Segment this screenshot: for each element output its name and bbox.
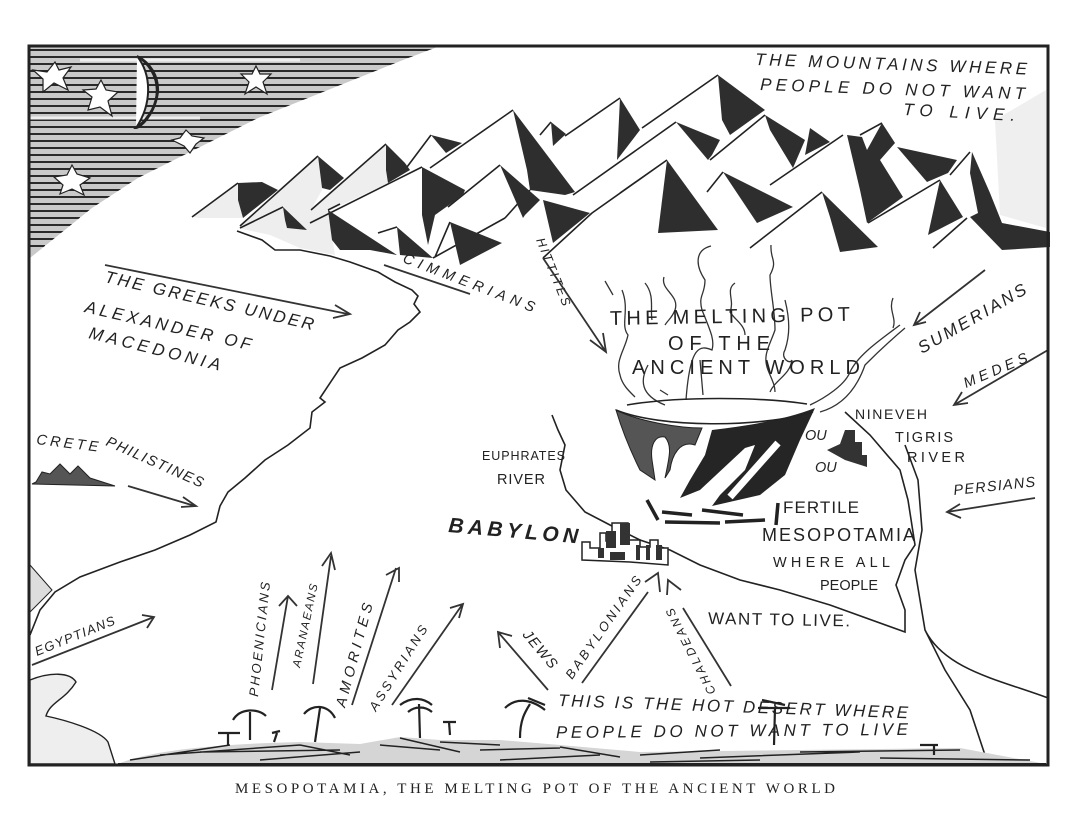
text: Nineveh: OU <box>815 460 837 476</box>
night sky <box>30 46 440 258</box>
desert migration labels: ASSYRIANS <box>365 622 431 714</box>
caption: MESOPOTAMIA, THE MELTING POT OF THE ANCIENT WORLD <box>235 781 835 797</box>
text: hot desert: PEOPLE DO NOT WANT TO LIVE <box>556 720 909 742</box>
label: Medes: MEDES <box>961 350 1030 392</box>
text: Nineveh: NINEVEH <box>855 406 927 422</box>
smoke <box>810 298 905 412</box>
icon: melting pot <box>616 298 905 525</box>
arrow: Philistines <box>128 486 196 507</box>
title: melting pot <box>610 304 860 379</box>
text: Hittites: HITTITES <box>533 236 573 308</box>
stippled sky shading <box>995 90 1046 228</box>
text: Fertile Mesopotamia <box>708 498 915 630</box>
text: Greeks <box>82 265 350 375</box>
arrow: Cimmerians <box>384 265 470 294</box>
rivers <box>552 412 1048 755</box>
horizon coast at bottom left <box>30 674 115 764</box>
arrow: Persians <box>947 498 1035 518</box>
text: Euphrates river <box>482 449 565 488</box>
label: Persians: PERSIANS <box>953 474 1036 499</box>
text: Nineveh: OU <box>805 428 827 444</box>
text: Greeks: MACEDONIA <box>87 323 223 375</box>
title: melting pot: OF THE <box>668 333 770 355</box>
text: Nineveh: TIGRIS <box>895 430 953 446</box>
text: Hittites <box>533 236 606 352</box>
text: Fertile Mesopotamia: FERTILE <box>783 498 859 517</box>
arrow: Egyptians <box>32 615 154 665</box>
icon: Nineveh city <box>827 430 867 467</box>
text: Euphrates river: EUPHRATES <box>482 449 565 463</box>
text: Fertile Mesopotamia: PEOPLE <box>820 578 878 594</box>
desert migration labels: AMORITES <box>333 601 377 710</box>
label: Persians <box>947 474 1036 518</box>
dark mountain faces <box>238 75 1050 265</box>
title: melting pot: ANCIENT WORLD <box>632 357 860 379</box>
arrow: Sumerians <box>914 270 985 325</box>
label: Egyptians <box>32 613 154 665</box>
label: Egyptians: EGYPTIANS <box>33 613 117 659</box>
icon: stars <box>33 62 271 195</box>
desert migration labels: PHOENICIANS <box>246 581 273 697</box>
steam <box>605 245 792 405</box>
text: Cimmerians: CIMMERIANS <box>401 251 537 316</box>
icon: city of Babylon <box>582 523 668 565</box>
label: Sumerians: SUMERIANS <box>914 280 1030 357</box>
text: Fertile Mesopotamia: WHERE ALL <box>773 555 890 571</box>
arrow: Medes <box>954 350 1048 405</box>
text: Greeks: ALEXANDER OF <box>82 297 255 355</box>
text: Euphrates river: RIVER <box>497 472 545 488</box>
text: Crete and Philistines <box>32 432 206 507</box>
text: Greeks: THE GREEKS UNDER <box>103 267 316 334</box>
icon: crescent moon <box>136 56 158 128</box>
text: Nineveh <box>805 406 965 476</box>
label: Medes <box>954 350 1048 405</box>
text: Fertile Mesopotamia: WANT TO LIVE. <box>708 609 850 630</box>
arrow: Greeks <box>105 265 350 318</box>
desert ground <box>118 737 1046 764</box>
coastline <box>30 231 420 635</box>
icon: Crete island <box>32 464 115 486</box>
text: hot desert: THIS IS THE HOT DESERT WHERE <box>558 691 909 722</box>
patch of land at left edge <box>30 565 52 612</box>
text: Crete and Philistines: CRETE <box>36 432 99 456</box>
desert migration labels: ARANAEANS <box>291 583 321 670</box>
text: Crete and Philistines: PHILISTINES <box>103 434 206 491</box>
mountains <box>192 75 1050 265</box>
desert migration labels: BABYLONIANS <box>562 573 645 682</box>
text: Babylon: BABYLON <box>448 514 580 548</box>
text: Nineveh: RIVER <box>907 450 965 466</box>
desert migration labels: JEWS <box>518 627 560 672</box>
text: mountains: TO LIVE. <box>903 100 1016 125</box>
arrow: Hittites <box>543 258 606 352</box>
text: mountains: PEOPLE DO NOT WANT <box>760 75 1027 103</box>
text: mountains: THE MOUNTAINS WHERE <box>755 50 1028 79</box>
desert migration labels: CHALDEANS <box>663 606 719 697</box>
text: hot desert <box>556 691 909 742</box>
title: melting pot: THE MELTING POT <box>610 304 850 330</box>
desert migration labels <box>246 553 731 714</box>
text: mountains <box>755 50 1028 125</box>
text: Fertile Mesopotamia: MESOPOTAMIA <box>762 525 915 545</box>
icon: palm trees <box>218 698 938 755</box>
